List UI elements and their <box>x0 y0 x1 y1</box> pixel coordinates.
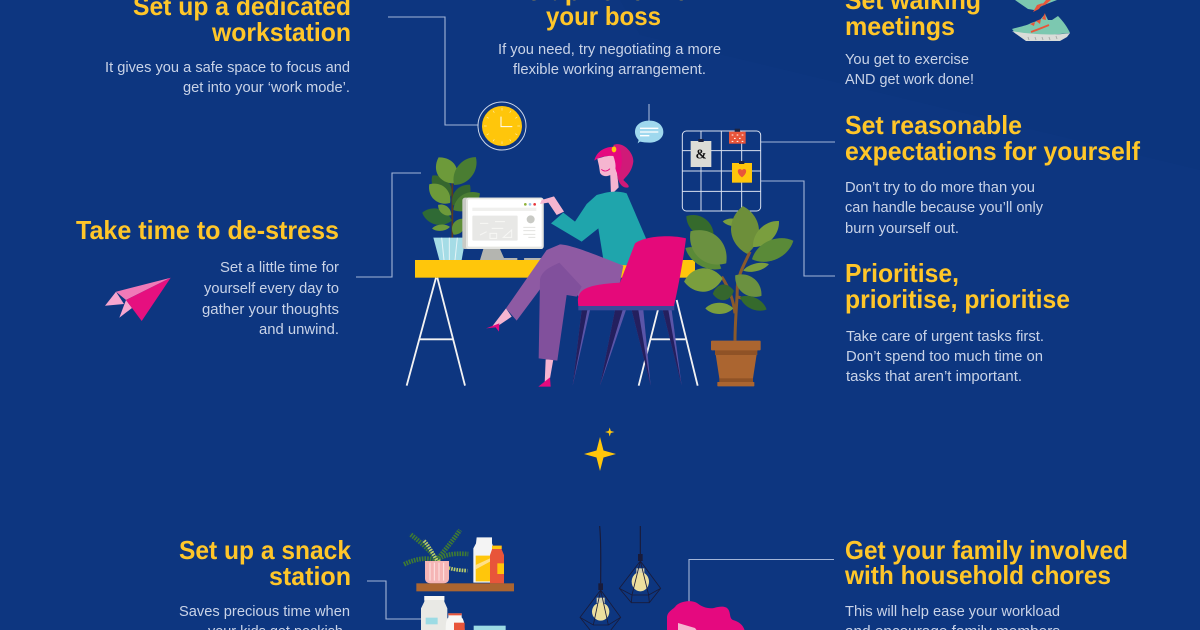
text: walking meetings description: You get to exercise <box>845 52 969 68</box>
illustration: pendant lamps <box>580 526 661 630</box>
panel: de-stress tip <box>76 215 339 338</box>
text: walking meetings description <box>845 52 974 88</box>
heading: your boss: your boss <box>546 1 661 31</box>
computer monitor <box>462 198 545 260</box>
illustration: woman working at desk <box>407 102 797 387</box>
text: walking meetings description: AND get work done! <box>845 72 974 88</box>
woman figure <box>486 144 646 387</box>
panel: set reasonable expectations tip <box>845 110 1140 237</box>
small plant in vase <box>420 152 484 260</box>
text: workstation description: get into your ‘work mode’. <box>183 80 350 96</box>
text: boss description: flexible working arrangement. <box>513 62 706 78</box>
panel: family chores tip <box>844 535 1128 630</box>
wall grid with notes <box>682 129 761 211</box>
shelf <box>416 583 514 591</box>
text: workstation description <box>105 60 350 96</box>
heading: set walking meetings: meetings <box>845 11 955 41</box>
text: snack station description: Saves precious time when <box>179 604 350 620</box>
connector lines <box>356 17 835 619</box>
text: prioritise description: Take care of urgent tasks first. <box>846 329 1044 345</box>
pink chair <box>573 236 686 386</box>
heading: your boss <box>508 0 700 31</box>
text: prioritise description: tasks that aren’t important. <box>846 369 1022 385</box>
heading: get your family involved <box>844 535 1128 590</box>
heading: set reasonable expectations: Set reasonable <box>845 110 1022 140</box>
icon: jars on shelf <box>473 537 504 583</box>
text: boss description <box>498 42 721 78</box>
icon: pendant lamp left <box>580 526 621 630</box>
text: de-stress description: Set a little time for <box>220 260 339 276</box>
icon: speech bubble <box>635 121 663 143</box>
heading: get your family involved: with household chores <box>844 560 1111 590</box>
text: de-stress description: gather your thoughts <box>202 302 339 318</box>
desk <box>407 260 698 386</box>
icon: potted fern <box>404 530 468 583</box>
panel: dedicated workstation tip <box>105 0 351 96</box>
text: de-stress description: and unwind. <box>259 322 339 338</box>
text: expectations description: Don’t try to do more than you <box>845 180 1035 196</box>
illustration: snack shelves <box>404 530 514 630</box>
icon: paper plane <box>105 278 171 321</box>
icon: wall clock <box>478 102 526 150</box>
panel: walking meetings tip <box>845 0 981 88</box>
heading: set up a snack station: station <box>269 561 351 591</box>
heading: prioritise <box>845 258 1070 314</box>
woman hair and face, partly visible <box>667 601 745 630</box>
text: boss description: If you need, try negotiating a more <box>498 42 721 58</box>
icon: pendant lamp right <box>619 526 661 603</box>
text: expectations description: burn yourself out. <box>845 221 959 237</box>
heading: set walking meetings <box>845 0 981 41</box>
text: de-stress description <box>202 260 339 338</box>
heading: prioritise: Prioritise, <box>845 258 959 288</box>
icon: milk carton and containers <box>421 596 506 630</box>
heading: get your family involved: Get your family involved <box>845 535 1128 565</box>
text: prioritise description: Don’t spend too much time on <box>846 349 1043 365</box>
heading: set reasonable expectations <box>845 110 1140 166</box>
icon: sparkle stars <box>584 428 616 471</box>
text: expectations description <box>845 180 1044 237</box>
text: snack station description <box>179 604 350 630</box>
panel: snack station tip <box>179 535 352 630</box>
panel: prioritise tip <box>845 258 1070 385</box>
text: prioritise description <box>846 329 1044 385</box>
text: de-stress description: yourself every day to <box>204 281 339 297</box>
icon: walking shoes <box>1012 0 1070 41</box>
heading: set up a dedicated workstation: workstation <box>211 17 351 47</box>
heading: set up a snack station: Set up a snack <box>179 535 352 565</box>
text: family chores description: This will help ease your workload <box>845 604 1060 620</box>
heading: set up a snack station <box>179 535 352 591</box>
text: workstation description: It gives you a safe space to focus and <box>105 60 350 76</box>
fiddle leaf plant in pot <box>681 205 797 386</box>
text: family chores description <box>845 604 1060 630</box>
heading: set up a dedicated workstation <box>133 0 351 47</box>
text: expectations description: can handle because you’ll only <box>845 200 1044 216</box>
heading: take time to de-stress: Take time to de-stress <box>76 215 339 245</box>
panel: talk to your boss tip <box>498 0 721 78</box>
heading: set reasonable expectations: expectations for yourself <box>845 136 1140 166</box>
wall grid with notes: & <box>695 146 707 161</box>
heading: prioritise: prioritise, prioritise <box>845 284 1070 314</box>
